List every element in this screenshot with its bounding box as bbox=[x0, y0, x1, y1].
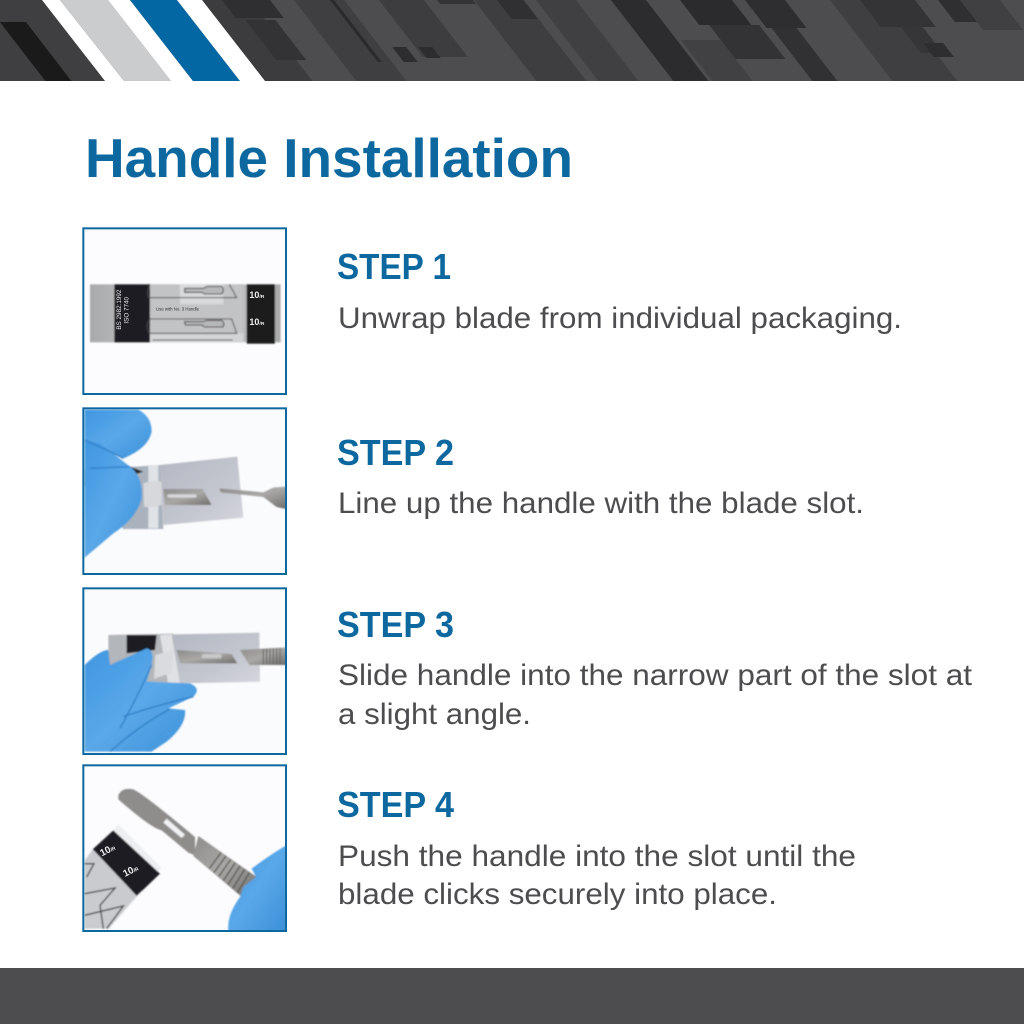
panel: step 1 photo: ISO 7740 bbox=[124, 296, 131, 324]
step 1 text: Unwrap blade from individual packaging. bbox=[338, 302, 902, 335]
step 1 text bbox=[337, 246, 902, 335]
step 3 text: Slide handle into the narrow part of the slot at bbox=[338, 659, 973, 692]
step 4 text bbox=[337, 784, 856, 911]
step 3 text: STEP 3 bbox=[337, 604, 454, 645]
footer bar bbox=[0, 968, 1024, 1024]
step 1 text: STEP 1 bbox=[337, 246, 451, 287]
step 4 text: Push the handle into the slot until the bbox=[338, 840, 856, 873]
step 4 text: STEP 4 bbox=[337, 784, 454, 825]
title: Handle Installation bbox=[85, 127, 573, 189]
step 2 text: Line up the handle with the blade slot. bbox=[338, 487, 864, 520]
panel: step 1 photo: BS 2982:1992 bbox=[116, 289, 123, 330]
panel: step 4 photo: 10/R bbox=[121, 863, 141, 880]
step 2 text: STEP 2 bbox=[337, 432, 454, 473]
panel: step 3 photo bbox=[83, 588, 286, 754]
panel: step 2 photo bbox=[83, 408, 286, 574]
panel: step 1 photo: 10/R bbox=[249, 317, 265, 327]
header banner bbox=[0, 0, 1024, 81]
panel: step 4 photo bbox=[83, 765, 286, 931]
panel: step 4 photo: 10/R bbox=[98, 842, 118, 859]
panel: step 1 photo: 10/R bbox=[249, 290, 265, 300]
step 2 text bbox=[337, 432, 864, 520]
step 4 text: blade clicks securely into place. bbox=[338, 878, 777, 911]
panel: step 1 photo bbox=[83, 228, 286, 394]
step 3 text bbox=[337, 604, 973, 731]
panel: step 1 photo: Use with No. 3 Handle bbox=[156, 306, 200, 311]
step 3 text: a slight angle. bbox=[338, 698, 531, 731]
